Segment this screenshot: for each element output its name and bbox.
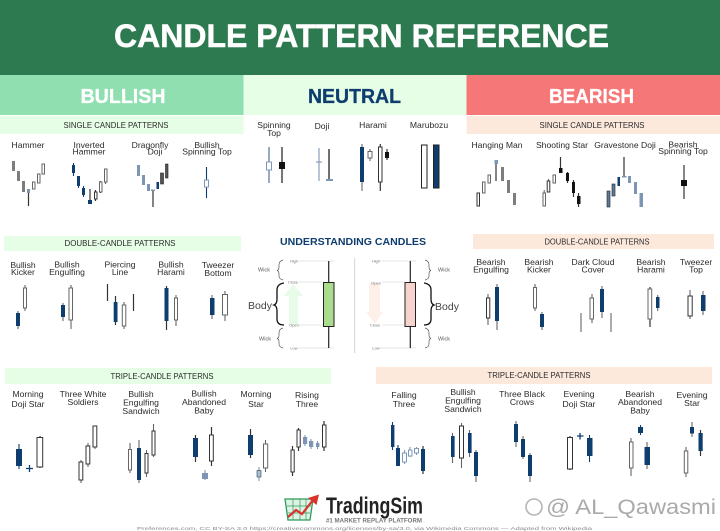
pattern: Falling Three: Falling: [391, 390, 417, 400]
footer credit line: Preferences.com, CC BY-SA 3.0 https://creativecommons.org/licenses/by-sa/3.0, via Wikimedia Commons — Adapted from Wikipedia: [137, 526, 593, 531]
pattern: Bullish Abandoned Baby: Baby: [194, 406, 214, 416]
pattern: Bearish Abandoned Baby: Baby: [630, 406, 650, 416]
subheading: bullish double candle patterns: DOUBLE-CANDLE PATTERNS: [64, 239, 176, 248]
pattern: Bullish Harami: [157, 260, 185, 330]
subheading: bearish single candle patterns: [466, 116, 720, 134]
pattern: Piercing Line: Line: [112, 267, 128, 277]
diagram: bullish candle anatomy: Low: [290, 346, 298, 350]
diagram: bullish candle anatomy: Close: [288, 280, 299, 284]
pattern: Dark Cloud Cover: Dark Cloud: [572, 257, 615, 267]
pattern: Harami neutral: [359, 120, 389, 191]
pattern: Morning Star: Star: [248, 399, 264, 409]
diagram: bearish candle anatomy: Body: [435, 301, 460, 313]
heading: bearish: BEARISH: [549, 85, 634, 108]
pattern: Three Black Crows: Crows: [510, 397, 534, 407]
pattern: Inverted Hammer: [72, 140, 107, 204]
logo: TradingSim: [285, 492, 423, 524]
heading: neutral: [244, 75, 466, 115]
pattern: Bearish Kicker: Kicker: [527, 264, 551, 274]
pattern: Shooting Star: Shooting Star: [536, 140, 588, 150]
diagram: bullish candle anatomy: High: [290, 258, 298, 264]
pattern: Bullish Engulfing Sandwich: Engulfing: [123, 398, 159, 408]
pattern: Morning Doji Star: Morning: [12, 389, 44, 399]
pattern: Morning Star: Morning: [240, 389, 272, 399]
pattern: Three White Soldiers: [60, 389, 107, 483]
subheading: bearish double candle patterns: DOUBLE-CANDLE PATTERNS: [544, 238, 650, 246]
diagram: bullish candle anatomy: Body: [248, 300, 273, 312]
pattern: Inverted Hammer: Inverted: [73, 140, 105, 150]
subheading: bearish single candle patterns: SINGLE CANDLE PATTERNS: [540, 121, 644, 130]
heading: neutral: NEUTRAL: [308, 85, 401, 108]
diagram: bearish candle anatomy: [366, 258, 460, 350]
pattern: Bullish Engulfing Sandwich: Sandwich: [122, 406, 160, 416]
pattern: Piercing Line: [104, 260, 136, 329]
pattern: Gravestone Doji: [594, 140, 656, 207]
pattern: Evening Doji Star: Evening: [563, 389, 595, 399]
pattern: Gravestone Doji: Gravestone Doji: [594, 140, 656, 150]
pattern: Bullish Engulfing Sandwich: Sandwich: [444, 404, 482, 414]
pattern: Tweezer Bottom: Tweezer: [202, 260, 234, 270]
subheading: bullish triple candle patterns: [5, 368, 331, 384]
pattern: Spinning Top neutral: Spinning: [257, 120, 291, 130]
subheading: bullish single candle patterns: [0, 116, 244, 134]
pattern: Bullish Kicker: Bullish: [10, 260, 36, 270]
pattern: Bearish Kicker: [524, 257, 554, 330]
pattern: Bullish Engulfing: Engulfing: [49, 267, 85, 277]
title banner: [0, 0, 720, 75]
pattern: Bearish Engulfing: [473, 257, 509, 330]
pattern: Harami neutral: Harami: [359, 120, 387, 130]
pattern: Doji neutral: Doji: [315, 121, 329, 131]
pattern: Three White Soldiers: Three White: [60, 389, 107, 399]
pattern: Bullish Spinning Top: Spinning Top: [182, 146, 232, 156]
pattern: Bearish Engulfing: Bearish: [476, 257, 506, 267]
logo: TradingSim: TradingSim: [326, 492, 423, 518]
diagram: bearish candle anatomy: Wick: [438, 268, 450, 274]
diagram: bearish candle anatomy: Open: [371, 280, 381, 286]
pattern: Morning Doji Star: [12, 389, 45, 472]
pattern: Marubozu neutral: [410, 120, 448, 188]
pattern: Three Black Crows: [499, 389, 546, 482]
pattern: Hanging Man: [471, 140, 523, 206]
pattern: Doji neutral: [315, 121, 333, 181]
pattern: Bearish Kicker: Bearish: [524, 257, 554, 267]
pattern: Bullish Engulfing Sandwich: [122, 389, 160, 483]
pattern: Bearish Spinning Top: Spinning Top: [658, 146, 708, 156]
pattern: Bullish Engulfing: Bullish: [54, 260, 80, 270]
pattern: Hammer: Hammer: [12, 140, 45, 150]
pattern: Dark Cloud Cover: [572, 257, 615, 332]
pattern: Evening Star: Star: [684, 398, 700, 408]
pattern: Bullish Engulfing Sandwich: [444, 387, 482, 482]
pattern: Morning Star: [240, 389, 272, 481]
pattern: Evening Star: Evening: [676, 390, 708, 400]
diagram: bullish candle anatomy: Wick: [259, 336, 271, 342]
diagram: bearish candle anatomy: Low: [372, 346, 380, 350]
pattern: Bullish Engulfing Sandwich: Bullish: [450, 387, 476, 397]
subheading: bearish triple candle patterns: TRIPLE-CANDLE PATTERNS: [488, 371, 590, 380]
pattern: Three Black Crows: Three Black: [499, 389, 546, 399]
pattern: Evening Star: [676, 390, 708, 477]
pattern: Bearish Harami: Harami: [637, 264, 665, 274]
subheading: bullish single candle patterns: SINGLE CANDLE PATTERNS: [64, 121, 168, 130]
pattern: Tweezer Bottom: [202, 260, 234, 321]
logo: TradingSim: #1 MARKET REPLAY PLATFORM: [326, 518, 422, 524]
pattern: Bearish Abandoned Baby: Bearish: [625, 389, 655, 399]
pattern: Tweezer Top: [680, 257, 712, 319]
pattern: Bullish Spinning Top: [182, 140, 232, 198]
heading: bullish: [0, 75, 244, 115]
pattern: Bearish Abandoned Baby: [618, 389, 662, 476]
title banner: CANDLE PATTERN REFERENCE: [114, 18, 609, 54]
pattern: Falling Three: Three: [393, 399, 415, 409]
pattern: Bearish Abandoned Baby: Abandoned: [618, 397, 662, 407]
pattern: Rising Three: Three: [296, 399, 318, 409]
pattern: Hanging Man: Hanging Man: [471, 140, 523, 150]
pattern: Bullish Spinning Top: Bullish: [194, 140, 220, 150]
divider between candle diagrams: [354, 258, 356, 353]
pattern: Tweezer Top: Top: [689, 264, 703, 274]
heading: bullish: BULLISH: [80, 85, 166, 108]
pattern: Bearish Engulfing: Engulfing: [473, 264, 509, 274]
icon: chart basket with rising arrow: [285, 494, 319, 520]
pattern: Bullish Kicker: Kicker: [11, 267, 35, 277]
diagram: bearish candle anatomy: Close: [370, 322, 381, 328]
pattern: Bullish Engulfing Sandwich: Bullish: [128, 389, 154, 399]
pattern: Rising Three: Rising: [295, 390, 319, 400]
pattern: Morning Doji Star: Doji Star: [12, 399, 45, 409]
subheading: bullish triple candle patterns: TRIPLE-CANDLE PATTERNS: [110, 372, 214, 381]
diagram: bearish candle anatomy: Wick: [438, 336, 450, 342]
pattern: Dragonfly Doji: Dragonfly: [132, 140, 169, 150]
pattern: Three White Soldiers: Soldiers: [67, 397, 99, 407]
pattern: Bearish Spinning Top: Bearish: [668, 140, 698, 150]
subheading: bearish triple candle patterns: [376, 367, 712, 384]
diagram: bullish candle anatomy: Open: [289, 322, 299, 328]
pattern: Falling Three: [391, 390, 425, 474]
diagram: bullish candle anatomy: Wick: [258, 268, 270, 274]
pattern: Hammer: [12, 140, 45, 206]
pattern: Bullish Abandoned Baby: Bullish: [191, 388, 217, 398]
pattern: Spinning Top neutral: [257, 120, 291, 183]
subheading: bearish double candle patterns: [473, 234, 714, 249]
diagram: bearish candle anatomy: High: [372, 258, 380, 264]
pattern: Spinning Top neutral: Top: [267, 128, 281, 138]
pattern: Bullish Engulfing: [49, 260, 85, 329]
section heading: understanding candles: UNDERSTANDING CANDLES: [280, 236, 426, 248]
heading: bearish: [466, 75, 720, 115]
pattern: Bearish Harami: Bearish: [636, 257, 666, 267]
pattern: Bearish Harami: [636, 257, 666, 327]
pattern: Evening Doji Star: Doji Star: [563, 399, 596, 409]
pattern: Dark Cloud Cover: Cover: [582, 264, 605, 274]
watermark: @ AL_Qawasmi: [546, 496, 716, 519]
pattern: Evening Doji Star: [563, 389, 596, 470]
diagram: bullish candle anatomy: [248, 258, 334, 350]
pattern: Tweezer Top: Tweezer: [680, 257, 712, 267]
pattern: Bullish Kicker: [10, 260, 36, 329]
pattern: Shooting Star: [536, 140, 588, 207]
pattern: Bullish Engulfing Sandwich: Engulfing: [445, 396, 481, 406]
pattern: Inverted Hammer: Hammer: [73, 146, 106, 156]
subheading: bullish double candle patterns: [4, 236, 241, 251]
pattern: Marubozu neutral: Marubozu: [410, 120, 448, 130]
pattern: Dragonfly Doji: [132, 140, 169, 207]
pattern: Bearish Spinning Top: [658, 140, 708, 199]
pattern: Rising Three: [291, 390, 326, 476]
pattern: Bullish Abandoned Baby: [182, 388, 226, 480]
pattern: Piercing Line: Piercing: [104, 260, 136, 270]
pattern: Bullish Abandoned Baby: Abandoned: [182, 397, 226, 407]
pattern: Bullish Harami: Bullish: [158, 260, 184, 270]
pattern: Bullish Harami: Harami: [157, 267, 185, 277]
pattern: Dragonfly Doji: Doji: [148, 146, 162, 156]
pattern: Tweezer Bottom: Bottom: [204, 268, 232, 278]
